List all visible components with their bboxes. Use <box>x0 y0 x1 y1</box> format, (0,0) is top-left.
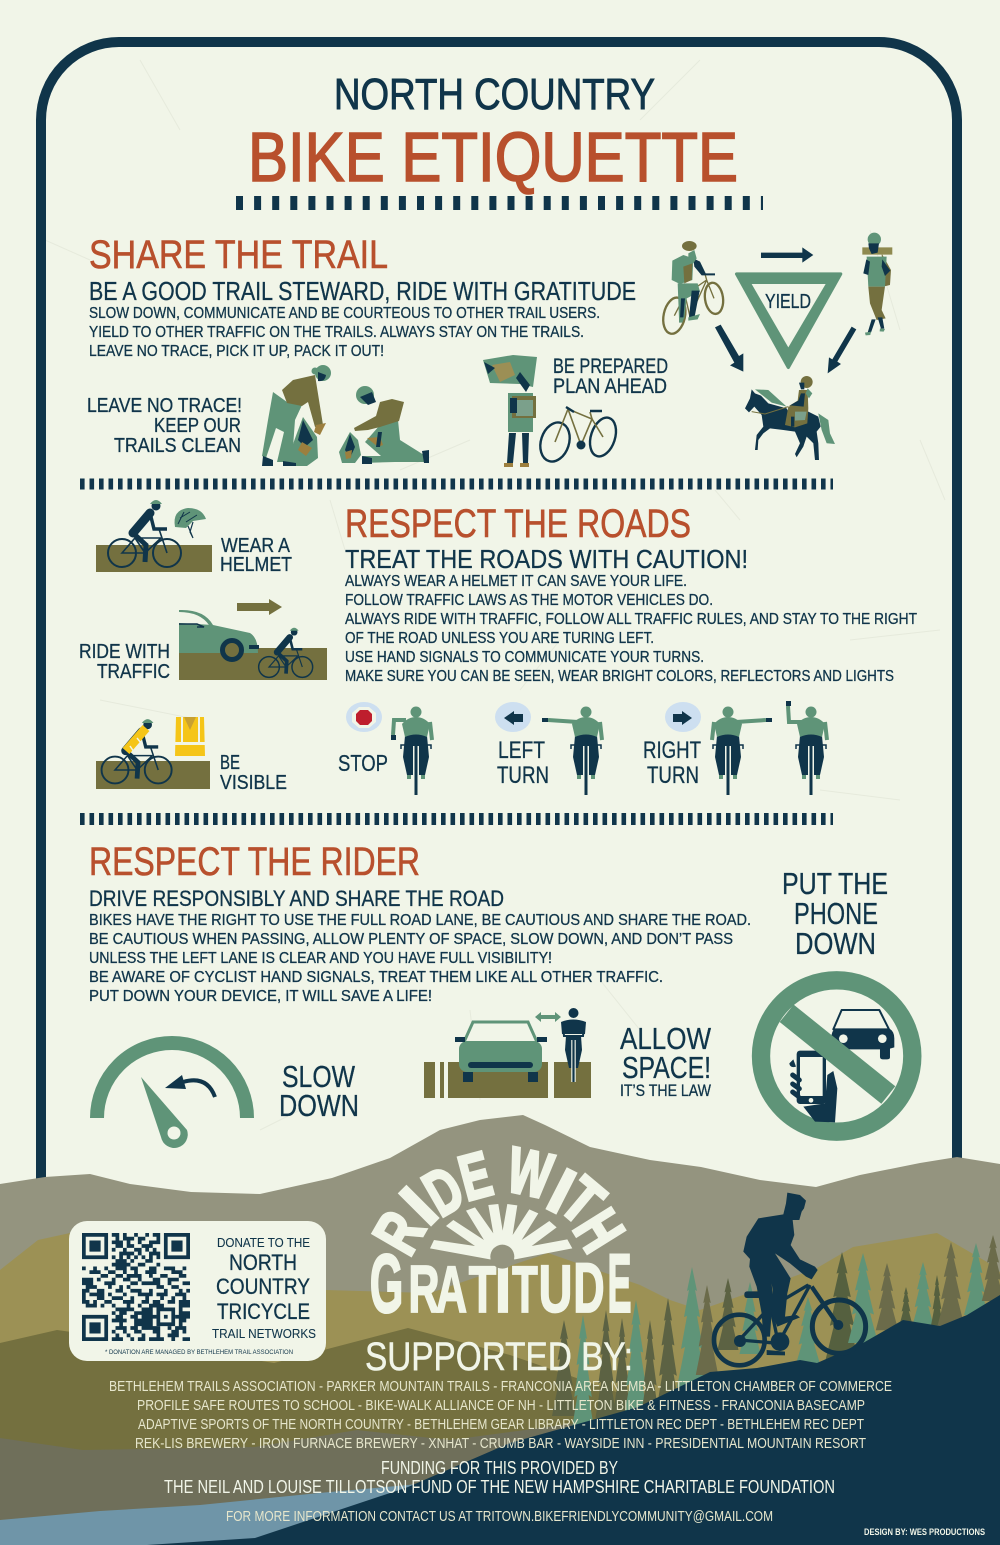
text block: road guidance: USE HAND SIGNALS TO COMMUNICATE YOUR TURNS. <box>345 649 704 666</box>
icon: left turn hand signal <box>542 706 602 795</box>
logo: ride with gratitude: R <box>359 1200 438 1265</box>
heading: respect the roads: RESPECT THE ROADS <box>345 502 691 546</box>
text block: trail guidance: LEAVE NO TRACE, PICK IT UP, PACK IT OUT! <box>89 343 384 360</box>
label: put the phone down: DOWN <box>795 926 876 961</box>
icon: no phone while driving sign <box>761 980 912 1132</box>
text block: road guidance: ALWAYS WEAR A HELMET IT CAN SAVE YOUR LIFE. <box>345 573 687 590</box>
label: left turn <box>497 737 549 789</box>
logo: ride with gratitude: A <box>436 1253 467 1326</box>
text block: trail guidance <box>89 305 600 360</box>
arrow: direction of traffic <box>237 599 282 615</box>
label: allow space <box>620 1021 712 1100</box>
icon: stop sign <box>346 702 382 732</box>
panel: share the trail <box>87 233 892 467</box>
label: be prepared plan ahead: BE PREPARED <box>553 355 668 378</box>
logo: ride with gratitude: W <box>501 1134 559 1213</box>
icon: person bending to collect litter <box>262 365 331 466</box>
text block: trail guidance: SLOW DOWN, COMMUNICATE AND BE COURTEOUS TO OTHER TRAIL USERS. <box>89 305 600 322</box>
subheading: trail steward: BE A GOOD TRAIL STEWARD, RIDE WITH GRATITUDE <box>89 276 636 306</box>
text: donate to trail networks: COUNTRY <box>216 1274 310 1299</box>
logo: ride with gratitude: R <box>408 1251 440 1326</box>
text: donate to trail networks: NORTH <box>229 1250 297 1275</box>
text block: funding credit: FUNDING FOR THIS PROVIDED BY <box>381 1458 618 1478</box>
arrow: cyclist yields to horse <box>715 325 743 372</box>
logo: ride with gratitude: D <box>412 1152 475 1230</box>
logo: ride with gratitude: I <box>495 1253 511 1327</box>
label: ride with traffic <box>79 641 170 683</box>
label: leave no trace: TRAILS CLEAN <box>114 435 241 457</box>
text block: driver guidance <box>89 912 751 1005</box>
text block: supporters list: PROFILE SAFE ROUTES TO SCHOOL - BIKE-WALK ALLIANCE OF NH - LITTLETON BIKE & FITNESS - FRANCONIA BASECAMP <box>137 1397 865 1414</box>
heading: supported by: SUPPORTED BY: <box>365 1335 633 1379</box>
arrow: cyclist yields to hiker <box>761 247 813 263</box>
label: allow space: SPACE! <box>622 1050 711 1085</box>
logo: ride with gratitude: T <box>547 1164 616 1239</box>
label: leave no trace: LEAVE NO TRACE! <box>87 395 242 417</box>
icon: bicycle helmet <box>175 508 206 538</box>
text block: driver guidance: BE AWARE OF CYCLIST HAND SIGNALS, TREAT THEM LIKE ALL OTHER TRAFFIC. <box>89 969 663 986</box>
text: donate to trail networks: * DONATION ARE MANAGED BY BETHLEHEM TRAIL ASSOCIATION <box>105 1349 293 1356</box>
label: stop: STOP <box>338 750 388 776</box>
icon: yield sign <box>737 274 841 367</box>
icon: wear a helmet cyclist <box>96 500 212 572</box>
text block: road guidance: OF THE ROAD UNLESS YOU ARE TURING LEFT. <box>345 630 654 647</box>
label: right turn: RIGHT <box>643 737 701 764</box>
label: be visible <box>220 752 287 794</box>
text block: road guidance <box>345 573 917 685</box>
logo: ride with gratitude: I <box>387 1174 450 1237</box>
text block: driver guidance: PUT DOWN YOUR DEVICE, IT WILL SAVE A LIFE! <box>89 988 432 1005</box>
icon: right turn raised arm signal <box>786 701 827 795</box>
subheading: drive responsibly: DRIVE RESPONSIBLY AND SHARE THE ROAD <box>89 886 504 911</box>
label: left turn: LEFT <box>498 737 545 764</box>
icon: right turn straight arm signal <box>712 706 772 795</box>
title <box>248 70 738 196</box>
sunburst <box>430 1204 572 1269</box>
label: wear a helmet: HELMET <box>220 554 292 576</box>
text block: funding credit <box>164 1458 835 1497</box>
logo: ride with gratitude: E <box>607 1237 632 1330</box>
icon: stop hand signal <box>391 706 432 795</box>
label: be prepared plan ahead: PLAN AHEAD <box>553 375 667 398</box>
text: donate to trail networks <box>105 1235 316 1356</box>
text block: driver guidance: BIKES HAVE THE RIGHT TO USE THE FULL ROAD LANE, BE CAUTIOUS AND SHARE THE ROAD. <box>89 912 751 929</box>
icon: car behind cyclist on road <box>179 610 327 680</box>
label: ride with traffic: TRAFFIC <box>97 661 170 683</box>
logo: ride with gratitude: E <box>452 1137 499 1215</box>
label: right turn: TURN <box>647 762 699 789</box>
logo: ride with gratitude: T <box>512 1252 538 1326</box>
icon: hiker reading map <box>483 355 537 467</box>
label: allow space: IT’S THE LAW <box>620 1081 711 1100</box>
text block: road guidance: ALWAYS RIDE WITH TRAFFIC, FOLLOW ALL TRAFFIC RULES, AND STAY TO THE RIGHT <box>345 611 917 628</box>
icon: right arrow <box>665 702 701 732</box>
icon: cyclist with backpack <box>660 241 725 336</box>
logo: ride with gratitude: H <box>560 1198 638 1264</box>
trees <box>552 1235 1000 1435</box>
panel: respect the roads <box>79 500 917 795</box>
logo: ride with gratitude: D <box>573 1249 605 1328</box>
label: right turn <box>643 737 701 789</box>
label: slow down: SLOW <box>282 1059 356 1094</box>
heading: respect the rider: RESPECT THE RIDER <box>89 840 420 884</box>
label: leave no trace: KEEP OUR <box>154 415 241 437</box>
heading: share the trail: SHARE THE TRAIL <box>89 233 388 277</box>
icon: yield sign: YIELD <box>765 291 811 313</box>
label: put the phone down: PUT THE <box>782 866 888 901</box>
label: left turn: TURN <box>497 762 549 789</box>
icon: mountain biker silhouette <box>714 1193 866 1365</box>
icon: left arrow <box>495 702 531 732</box>
label: allow space: ALLOW <box>620 1021 712 1056</box>
dark foreground slope <box>147 1295 1000 1545</box>
label: put the phone down <box>782 866 888 961</box>
mountain landscape footer <box>0 1115 1000 1545</box>
icon: speedometer <box>97 1043 247 1148</box>
icon: road with car and cyclist passing space <box>424 1008 591 1098</box>
text block: funding credit: THE NEIL AND LOUISE TILLOTSON FUND OF THE NEW HAMPSHIRE CHARITABLE FOUNDATION <box>164 1477 835 1497</box>
label: be prepared plan ahead <box>553 355 668 398</box>
rounded frame <box>41 42 957 1190</box>
QR code <box>82 1233 190 1341</box>
text block: driver guidance: UNLESS THE LEFT LANE IS CLEAR AND YOU HAVE FULL VISIBILITY! <box>89 950 552 967</box>
logo: ride with gratitude <box>359 1134 638 1331</box>
icon: bicycle <box>536 407 621 465</box>
panel: respect the rider <box>89 840 912 1148</box>
logo: ride with gratitude: U <box>539 1253 572 1327</box>
logo: ride with gratitude: I <box>537 1155 586 1227</box>
label: leave no trace <box>87 395 242 457</box>
icon: be visible cyclist <box>96 719 210 789</box>
icon: hi-vis vest <box>175 717 205 756</box>
label: slow down: DOWN <box>279 1088 359 1123</box>
icon: person kneeling with litter bag <box>339 386 429 464</box>
panel: donate QR card <box>69 1221 326 1361</box>
text: donate to trail networks: DONATE TO THE <box>217 1235 310 1250</box>
subheading: treat the roads with caution: TREAT THE ROADS WITH CAUTION! <box>345 544 748 574</box>
text block: driver guidance: BE CAUTIOUS WHEN PASSING, ALLOW PLENTY OF SPACE, SLOW DOWN, AND DON’T PASS <box>89 931 733 948</box>
label: be visible: BE <box>220 752 240 774</box>
text: donate to trail networks: TRAIL NETWORKS <box>212 1326 316 1341</box>
label: be visible: VISIBLE <box>220 772 287 794</box>
text: donate to trail networks: TRICYCLE <box>217 1299 310 1324</box>
logo: ride with gratitude: G <box>370 1238 403 1331</box>
label: wear a helmet: WEAR A <box>221 535 291 557</box>
text: contact: FOR MORE INFORMATION CONTACT US AT TRITOWN.BIKEFRIENDLYCOMMUNITY@GMAIL.COM <box>226 1508 773 1525</box>
text block: trail guidance: YIELD TO OTHER TRAFFIC ON THE TRAILS. ALWAYS STAY ON THE TRAILS. <box>89 324 584 341</box>
logo: ride with gratitude: T <box>469 1252 496 1326</box>
label: ride with traffic: RIDE WITH <box>79 641 170 663</box>
label: slow down <box>279 1059 359 1123</box>
title: NORTH COUNTRY <box>334 70 655 119</box>
text block: road guidance: MAKE SURE YOU CAN BE SEEN, WEAR BRIGHT COLORS, REFLECTORS AND LIGHTS <box>345 668 894 685</box>
icon: hiker with backpack <box>862 233 892 335</box>
text block: road guidance: FOLLOW TRAFFIC LAWS AS THE MOTOR VEHICLES DO. <box>345 592 713 609</box>
label: put the phone down: PHONE <box>794 896 878 931</box>
title: BIKE ETIQUETTE <box>248 118 738 196</box>
label: wear a helmet <box>220 535 292 576</box>
icon: horse and rider <box>745 376 835 460</box>
text block: supporters list <box>109 1378 892 1452</box>
arrow: hiker yields to horse <box>828 327 856 373</box>
